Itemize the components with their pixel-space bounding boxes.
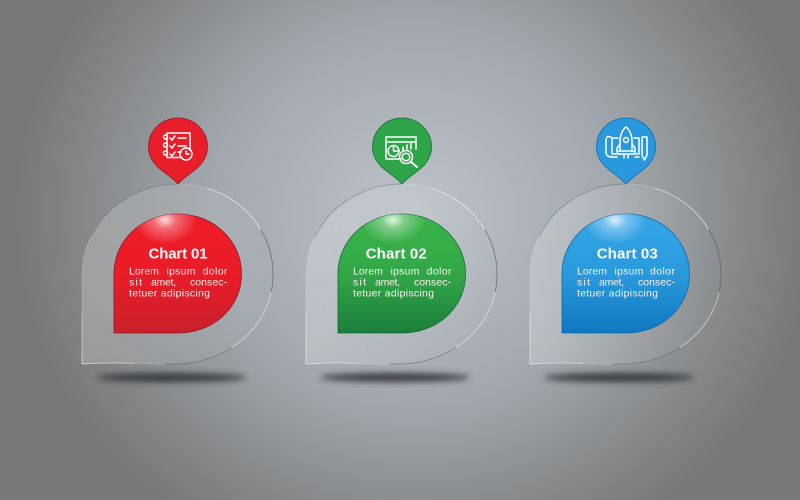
body text: amet, xyxy=(151,276,176,288)
body text: tetuer adipiscing xyxy=(353,287,434,299)
body text: dolor xyxy=(202,265,228,277)
body text: ipsum xyxy=(614,265,644,277)
body text: amet, xyxy=(375,276,400,288)
panel: Chart 03 xyxy=(530,118,721,382)
green pin xyxy=(372,118,432,184)
glass teardrop xyxy=(530,184,721,364)
body text: Lorem xyxy=(353,265,383,277)
floor shadow xyxy=(320,373,470,382)
body text: tetuer adipiscing xyxy=(129,287,210,299)
body text xyxy=(353,265,452,299)
icon: rocket on blueprint with pencil xyxy=(606,127,647,160)
glass teardrop xyxy=(306,184,497,364)
body text: ipsum xyxy=(166,265,196,277)
body text xyxy=(129,265,228,299)
floor shadow xyxy=(96,373,246,382)
body text: sit xyxy=(353,276,366,288)
body text: consec- xyxy=(638,276,676,288)
green teardrop card xyxy=(338,214,466,333)
blue pin xyxy=(596,118,656,184)
panel: Chart 01 xyxy=(82,118,273,382)
body text: tetuer adipiscing xyxy=(577,287,658,299)
icon: dashboard with magnifier xyxy=(386,137,417,167)
body text: sit xyxy=(129,276,142,288)
body text: dolor xyxy=(650,265,676,277)
card highlight xyxy=(586,214,644,242)
heading: Chart 02 xyxy=(366,246,427,262)
floor shadow xyxy=(544,373,694,382)
blue teardrop card xyxy=(562,214,690,333)
icon: checklist with clock xyxy=(164,133,192,160)
body text: ipsum xyxy=(390,265,420,277)
body text: amet, xyxy=(599,276,624,288)
glass teardrop xyxy=(82,184,273,364)
body text: Lorem xyxy=(577,265,607,277)
body text xyxy=(577,265,676,299)
card highlight xyxy=(137,214,195,242)
heading: Chart 01 xyxy=(148,246,208,262)
red teardrop card xyxy=(114,214,242,333)
body text: Lorem xyxy=(129,265,159,277)
body text: sit xyxy=(577,276,590,288)
red pin xyxy=(148,118,208,184)
body text: dolor xyxy=(426,265,452,277)
card highlight xyxy=(364,214,422,242)
heading: Chart 03 xyxy=(597,246,658,262)
body text: consec- xyxy=(190,276,228,288)
body text: consec- xyxy=(414,276,452,288)
panel: Chart 02 xyxy=(306,118,497,382)
